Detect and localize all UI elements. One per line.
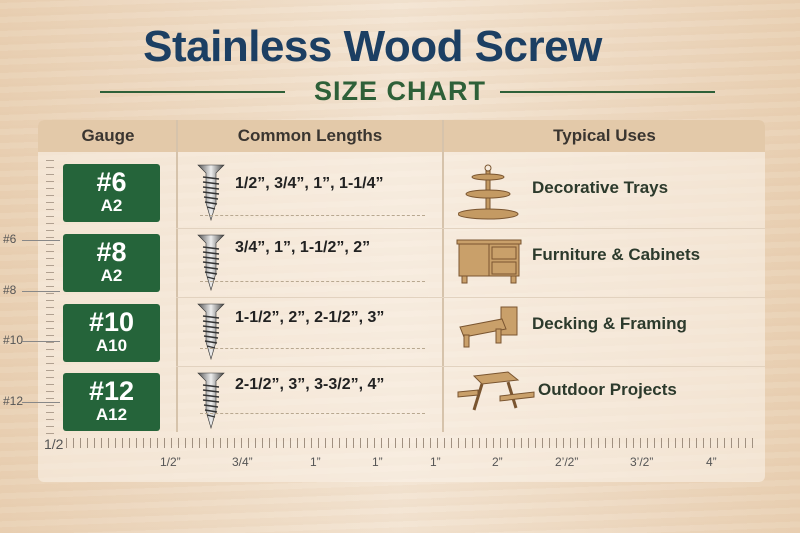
gauge badge #10 [63, 304, 160, 362]
gauge badge #8: #8 [96, 237, 127, 267]
use: decorative trays: Decorative Trays [532, 178, 668, 197]
icon: deck chair [459, 306, 518, 348]
text: 3’/2” [630, 455, 653, 469]
text: 4” [706, 455, 717, 469]
icon: cabinet [456, 240, 522, 284]
gauge badge #10: #10 [89, 307, 134, 337]
left ruler [3, 160, 60, 434]
heading: gauge: Gauge [82, 126, 134, 145]
gauge badge #8: A2 [101, 266, 122, 285]
lengths #10: 1-1/2”, 2”, 2-1/2”, 3” [235, 309, 384, 326]
text: 1” [430, 455, 441, 469]
use: outdoor: Outdoor Projects [538, 380, 677, 399]
text: 2” [492, 455, 503, 469]
bottom ruler [44, 436, 753, 452]
use: decking: Decking & Framing [532, 314, 687, 333]
left ruler: #6 [3, 232, 16, 246]
left ruler: #10 [3, 333, 23, 347]
heading: common lengths: Common Lengths [238, 126, 382, 145]
gauge badge #12: #12 [89, 376, 134, 406]
gauge badge #6 [63, 164, 160, 222]
title: Stainless Wood Screw [143, 22, 602, 71]
gauge badge #8 [63, 234, 160, 292]
heading: typical uses: Typical Uses [553, 126, 656, 145]
gauge badge #6: #6 [96, 167, 127, 197]
lengths #6: 1/2”, 3/4”, 1”, 1-1/4” [235, 175, 384, 192]
use: furniture: Furniture & Cabinets [532, 245, 700, 264]
gauge badge #12 [63, 373, 160, 431]
lengths #8: 3/4”, 1”, 1-1/2”, 2” [235, 239, 370, 256]
text: 3/4” [232, 455, 253, 469]
left ruler: #8 [3, 283, 16, 297]
text: 2’/2” [555, 455, 578, 469]
header row [38, 120, 765, 152]
text: 1/2” [160, 455, 181, 469]
icon: tiered tray [458, 164, 518, 220]
icon: screws [197, 164, 225, 429]
icon: picnic table [458, 372, 534, 410]
text: 1” [310, 455, 321, 469]
gauge badge #10: A10 [96, 336, 127, 355]
subtitle: size chart: SIZE CHART [314, 76, 486, 106]
left ruler: #12 [3, 394, 23, 408]
gauge badge #6: A2 [101, 196, 122, 215]
gauge badge #12: A12 [96, 405, 127, 424]
text: 1” [372, 455, 383, 469]
panel: chart table [38, 120, 765, 482]
bottom ruler: 1/2 [44, 436, 63, 452]
lengths #12: 2-1/2”, 3”, 3-3/2”, 4” [235, 376, 384, 393]
